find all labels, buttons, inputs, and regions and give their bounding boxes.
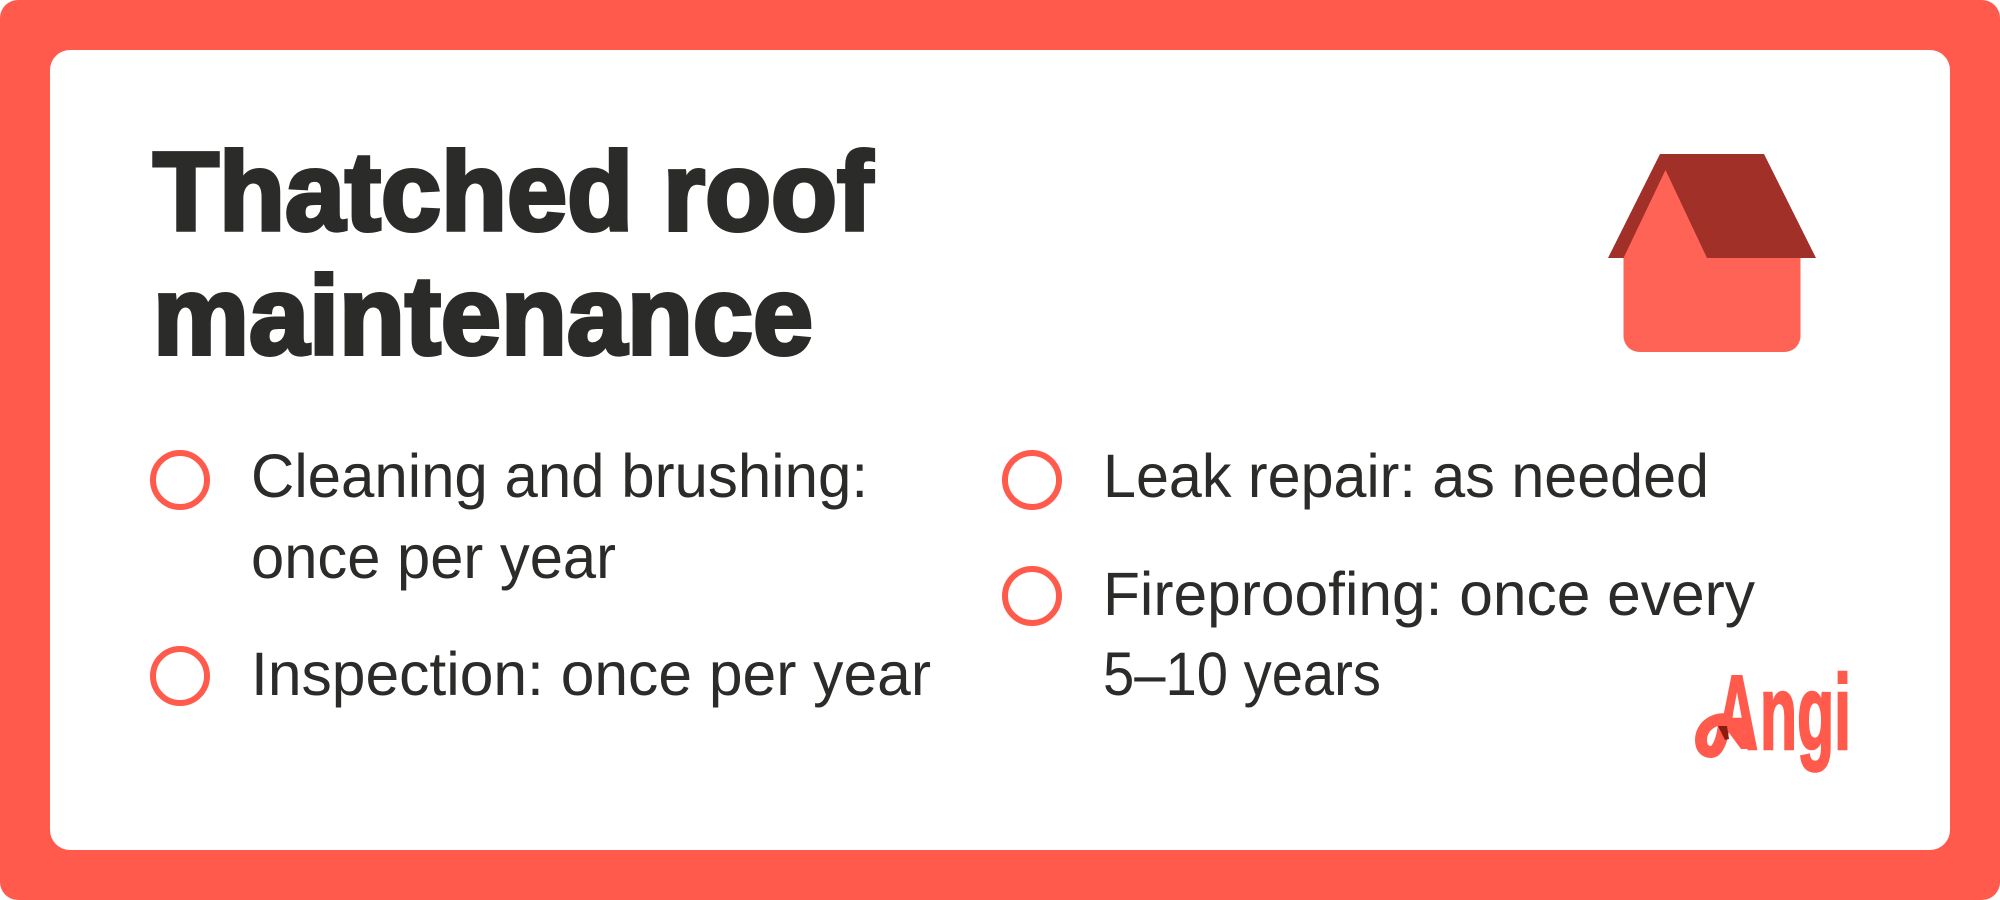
list item: fireproofing: 5–10 years <box>1103 640 1381 708</box>
list item: cleaning and brushing <box>153 442 868 591</box>
icon: house with thatched roof <box>1608 154 1816 352</box>
list item: cleaning and brushing: Cleaning and brushing: <box>251 442 868 510</box>
logo: Angi <box>1701 654 1851 772</box>
logo: Angi: A <box>1716 654 1758 772</box>
title: Thatched roof <box>153 130 874 254</box>
title <box>153 130 874 378</box>
logo: Angi: ngi <box>1760 654 1851 772</box>
title: maintenance <box>153 254 813 378</box>
list item: fireproofing <box>1005 560 1755 708</box>
list item: cleaning and brushing: once per year <box>251 523 616 591</box>
list item: leak repair: Leak repair: as needed <box>1103 442 1709 510</box>
list item: fireproofing: Fireproofing: once every <box>1103 560 1755 628</box>
list item: inspection: Inspection: once per year <box>251 640 931 708</box>
